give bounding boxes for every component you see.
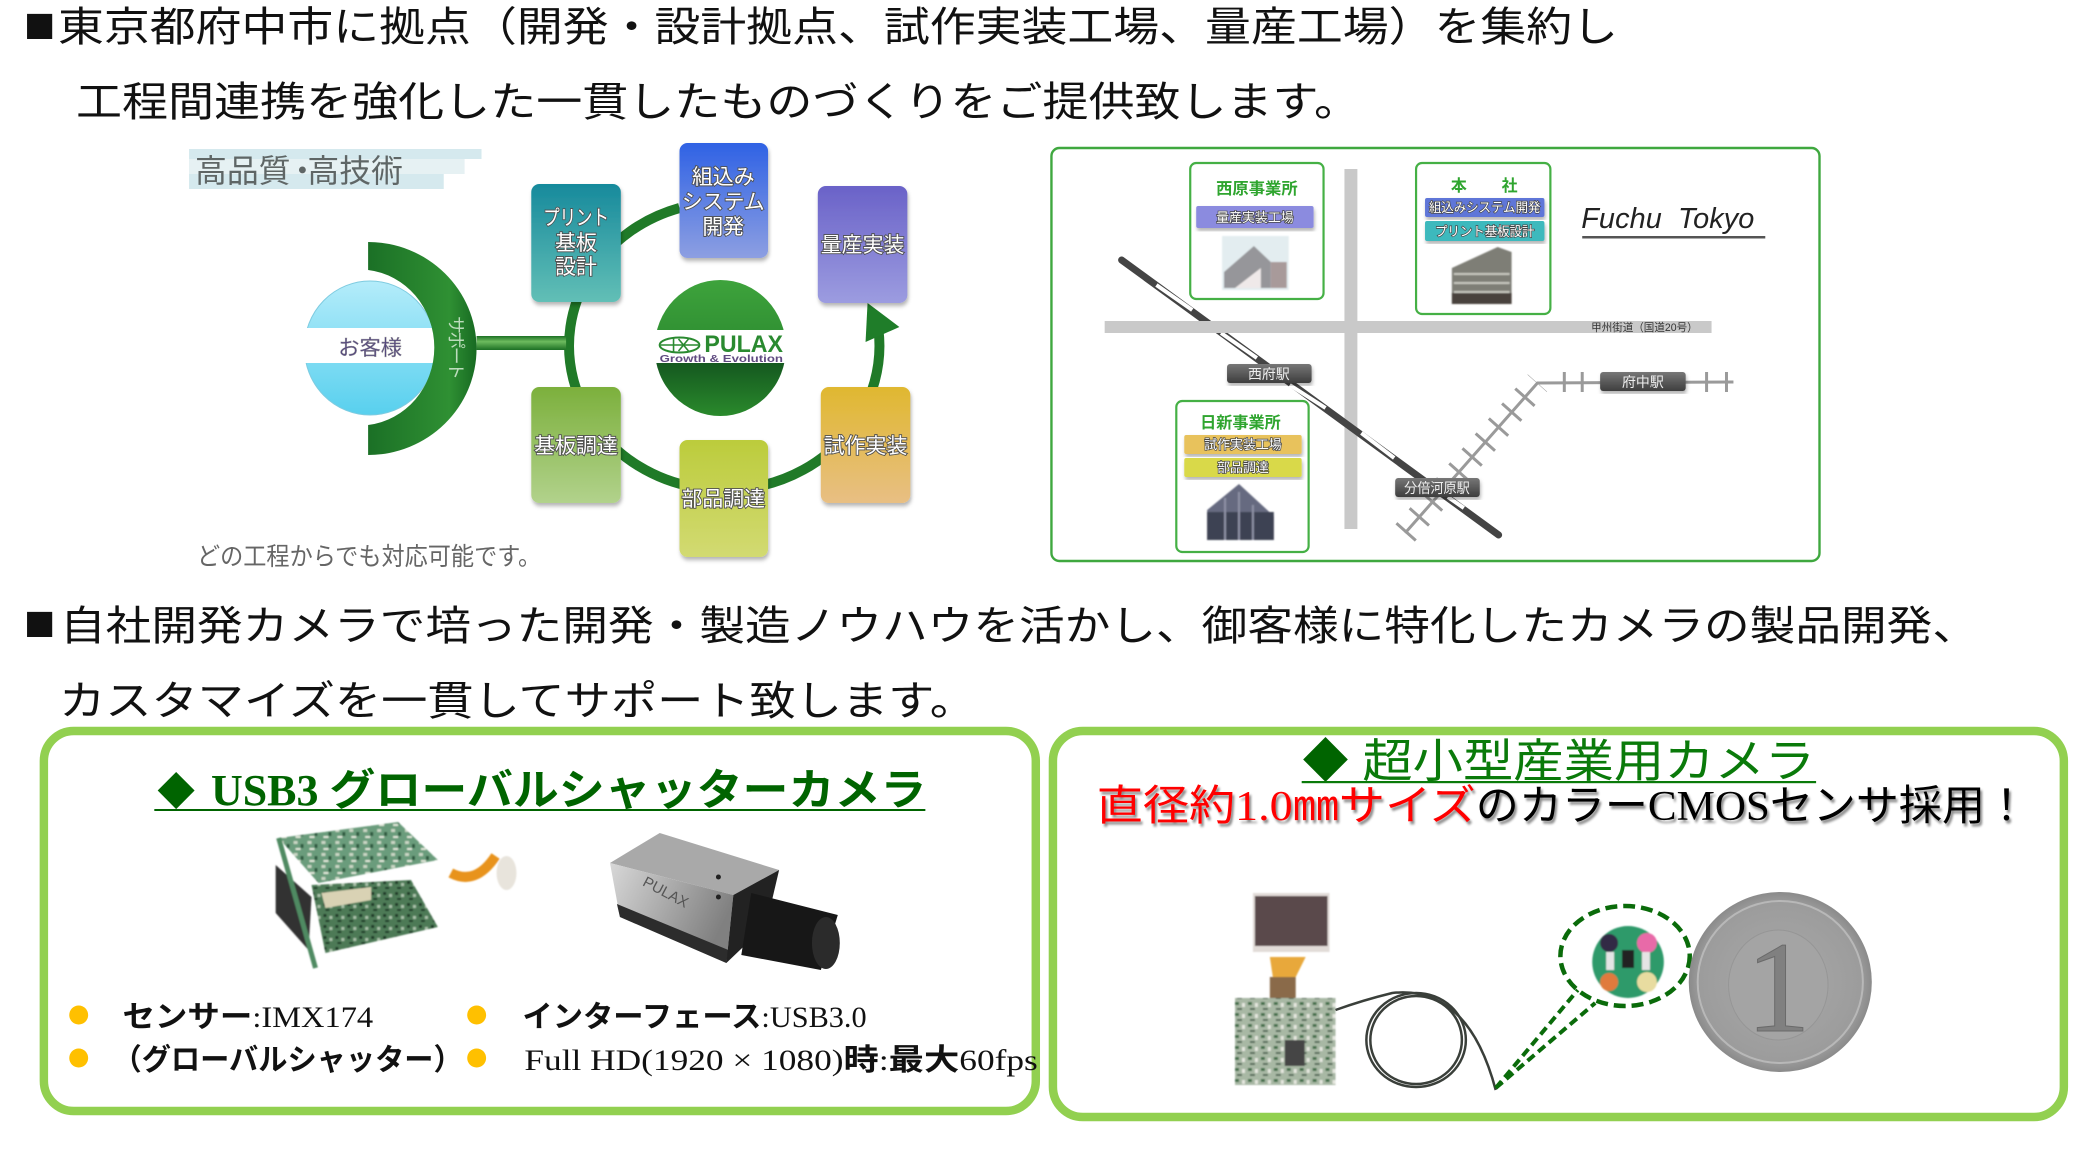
main road Koshu Kaido: 甲州街道（国道20号）	[1591, 320, 1698, 334]
tile: embedded system development: 開発	[702, 216, 744, 239]
heading: second bullet, line 1: ■	[24, 594, 55, 652]
railway: Keio line	[1122, 260, 1499, 535]
heading: second bullet, line 1: 自社開発カメラで培った開発・製造ノウハウを活かし、御客様に特化したカメラの製品開発、	[60, 603, 1978, 649]
tile: prototype assembly: 試作実装	[824, 435, 907, 458]
panel: process diagram	[189, 143, 910, 571]
PULAX logo circle: Growth & Evolution	[660, 354, 783, 365]
site: Nisshin: 試作実装工場	[1204, 437, 1282, 452]
label: Fuchu Tokyo: Fuchu Tokyo	[1581, 203, 1754, 235]
tile: PCB design: 設計	[555, 256, 597, 279]
railway: Nambu line	[1405, 372, 1733, 533]
site: head office: 社	[1502, 177, 1518, 195]
tile: board procurement	[531, 387, 621, 503]
site: Nishihara: 量産実装工場	[1216, 210, 1294, 225]
station: Nishifu	[1227, 364, 1312, 383]
photo: board camera	[276, 822, 516, 968]
site: head office: 本	[1451, 177, 1467, 195]
tile: PCB design	[531, 184, 621, 302]
site: Nishihara	[1190, 163, 1324, 299]
bullet	[69, 1006, 88, 1024]
site: head office: 組込みシステム開発	[1429, 200, 1540, 215]
callout: dashed lines	[1496, 987, 1595, 1088]
photo: boxed camera	[610, 833, 840, 970]
banner: high quality, high technology: ・	[287, 153, 318, 189]
tile: prototype assembly	[821, 387, 910, 503]
photo: Nishihara building	[1222, 236, 1289, 290]
station: Nishifu: 西府駅	[1248, 366, 1290, 382]
cable	[1336, 992, 1496, 1090]
heading: first bullet, line 1: 東京都府中市に拠点（開発・設計拠点、試作実装工場、量産工場）を集約し	[58, 4, 1618, 50]
process ring with arrow	[569, 208, 899, 490]
vertical road	[1344, 169, 1357, 529]
photo: Nisshin building	[1207, 484, 1274, 540]
bullet	[467, 1006, 486, 1024]
station: Bubaigawara	[1395, 478, 1480, 497]
tile: embedded system development: システム	[682, 191, 765, 214]
spec: interface: インターフェース:USB3.0	[522, 1001, 867, 1034]
site: Nisshin: 部品調達	[1217, 460, 1269, 475]
spec: sensor: センサー :IMX174	[122, 1001, 373, 1034]
subtitle	[1097, 783, 2028, 830]
tile: mass production	[818, 186, 907, 303]
spec: global shutter: （グローバルシャッター）	[113, 1044, 463, 1077]
note: any process available: どの工程からでも対応可能です。	[197, 543, 541, 571]
site: head office: プリント基板設計	[1435, 224, 1535, 239]
callout: dashed circle with sensor	[1560, 906, 1690, 1006]
banner: high quality, high technology: 高品質	[195, 153, 291, 189]
station: Fuchu: 府中駅	[1622, 374, 1664, 390]
bullet	[69, 1048, 88, 1068]
subtitle: 直径約1.0㎜サイズ	[1097, 783, 1476, 830]
site: head office	[1416, 163, 1550, 314]
tile: board procurement: 基板調達	[534, 435, 618, 458]
panel title: グローバルシャッターカメラ	[329, 767, 926, 815]
tile: parts procurement: 部品調達	[682, 488, 765, 511]
PULAX logo circle	[647, 280, 794, 416]
banner: high quality, high technology	[189, 149, 482, 189]
connector bar	[477, 336, 566, 350]
tile: mass production: 量産実装	[821, 234, 904, 257]
photo: boxed camera: PULAX	[640, 873, 691, 912]
banner: high quality, high technology: 高技術	[307, 153, 403, 189]
panel title: USB3	[211, 767, 318, 815]
support arc: サポート	[446, 316, 466, 380]
spec list	[69, 1001, 1038, 1077]
panel title: ◆	[1303, 735, 1349, 787]
spec: frame rate: Full HD(1920 × 1080) 時:最大 60fps	[524, 1044, 1038, 1077]
photo: LCD and board	[1235, 893, 1336, 1085]
site: Nisshin	[1176, 401, 1309, 552]
panel: Fuchu map	[1051, 148, 1820, 561]
bullet	[467, 1048, 486, 1068]
photo: one yen coin: 1	[1746, 916, 1811, 1060]
photo: one yen coin	[1689, 892, 1872, 1072]
PULAX logo circle: PULAX	[704, 331, 783, 358]
site: Nisshin: 日新事業所	[1200, 413, 1281, 432]
tile: embedded system development: 組込み	[692, 166, 755, 189]
photo: sensor chip	[1592, 926, 1664, 998]
tile: parts procurement	[680, 440, 768, 557]
heading: second bullet, line 2: カスタマイズを一貫してサポート致します。	[59, 678, 976, 724]
site: Nishihara: 西原事業所	[1216, 179, 1298, 198]
panel: ultra small industrial camera	[1053, 731, 2064, 1117]
tile: PCB design: 基板	[555, 232, 597, 255]
main road Koshu Kaido	[1105, 320, 1712, 334]
customer circle: お客様	[338, 337, 402, 360]
heading: second bullet, line 1	[24, 594, 1978, 652]
customer circle	[298, 281, 443, 415]
subtitle: のカラーCMOSセンサ採用！	[1476, 784, 2028, 830]
tile: PCB design: プリント	[543, 207, 609, 230]
station: Fuchu	[1600, 372, 1686, 391]
heading: first bullet, line 2: 工程間連携を強化した一貫したものづくりをご提供致します。	[76, 79, 1360, 125]
panel: USB3 global shutter camera	[44, 731, 1038, 1111]
panel title: 超小型産業用カメラ	[1362, 735, 1815, 787]
photo: head office building	[1452, 247, 1512, 304]
tile: embedded system development	[680, 143, 768, 258]
panel title: ◆	[157, 772, 195, 814]
support arc	[368, 242, 477, 455]
station: Bubaigawara: 分倍河原駅	[1404, 480, 1470, 496]
